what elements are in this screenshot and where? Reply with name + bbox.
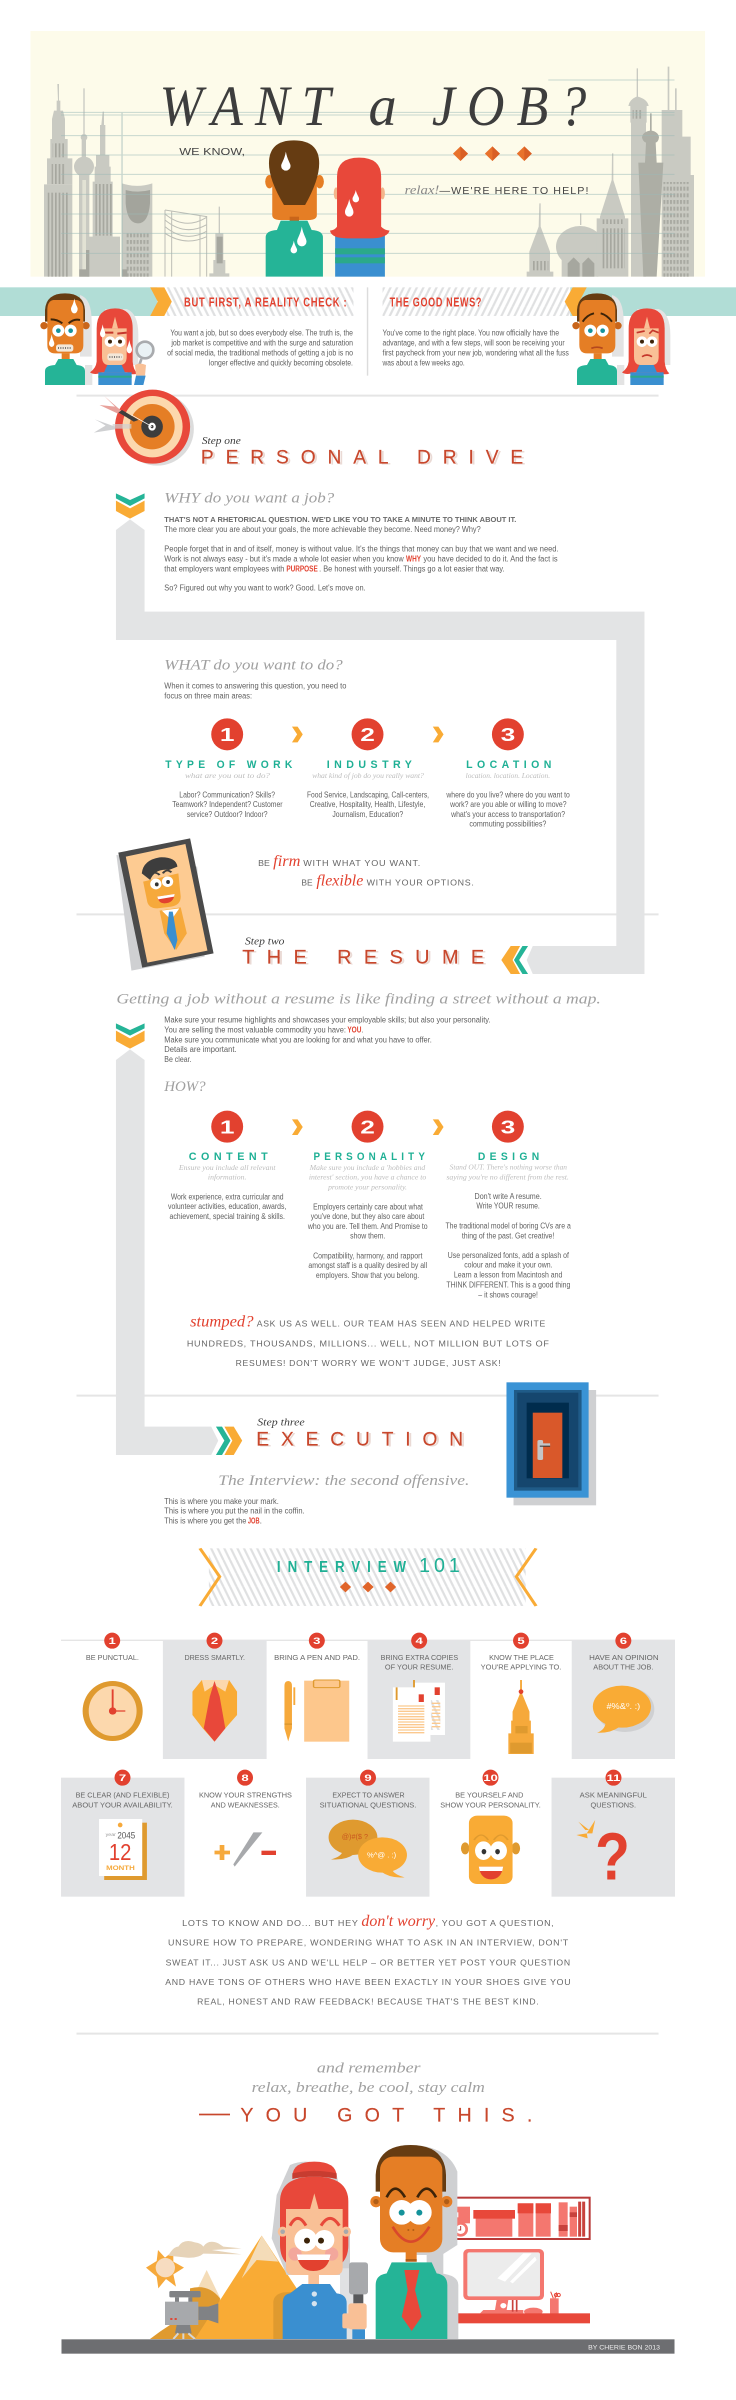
step 3: location: 3 [501,724,515,745]
tip 2: dress smartly: 2 [211,1637,218,1646]
step 1: type of work: service? Outdoor? Indoor? [187,810,268,819]
panel: reality check band: THE GOOD NEWS? [390,295,482,310]
tip 1: be punctual [83,1633,143,1741]
character: worried man [40,293,92,385]
step 3: location: what's your access to transportation? [450,810,566,819]
character: man in tie [370,2145,458,2339]
step 3: location: LOCATION [466,758,556,770]
illustration: sun [146,2250,184,2288]
text block: resume intro: Make sure your resume highlights and showcases your employable skills; but also your personality. [164,1016,491,1025]
tip 3: pen and pad [274,1633,360,1742]
text block: why: . Be honest with yourself. Things go a lot easier that way. [319,565,505,574]
text block: don't worry: , YOU GOT A QUESTION, [436,1919,554,1928]
heading: resume tagline: Getting a job without a resume is like finding a street without a map. [116,990,601,1007]
heading: the resume: THE RESUME [242,947,497,968]
arrow [292,727,303,742]
banner: interview 101: 101 [419,1555,464,1577]
step 2: personality: Compatibility, harmony, and rapport [313,1252,423,1261]
text block: resume intro: Make sure you communicate what you are looking for and what you have to offer. [164,1036,432,1045]
tip 7: availability: 2045 [117,1831,135,1841]
tip 8: strengths: KNOW YOUR STRENGTHS [199,1791,292,1799]
subtitle: relax: —WE'RE HERE TO HELP! [439,185,590,196]
text: design last line: – it shows courage! [478,1291,538,1300]
step 3: design: Learn a lesson from Macintosh and [454,1271,562,1280]
step 3: design: saying you're no different from the rest. [446,1173,569,1181]
illustration: camera [165,2291,218,2339]
icon: microphone [342,2262,368,2339]
step 3: design: Use personalized fonts, add a splash of [448,1251,569,1260]
tip 6: opinion: ABOUT THE JOB. [593,1663,653,1671]
text: relax breathe: relax, breathe, be cool, stay calm [252,2079,485,2095]
footer bar [61,2339,675,2354]
tip 7: availability: 7 [119,1774,126,1783]
callout: be firm: firm [273,853,300,870]
banner: interview 101 [200,1548,536,1606]
text block: don't worry: SWEAT IT... JUST ASK US AND WE'LL HELP – OR BETTER YET POST YOUR QUESTION [166,1959,571,1968]
text block: reality check: job market is competitive and with the surge and saturation [171,339,353,348]
text block: good news: advantage, and with a few steps, will soon be receiving your [383,339,565,348]
text block: interview: JOB [248,1517,260,1526]
step 3: design [445,1111,571,1290]
callout: stumped: ASK US AS WELL. OUR TEAM HAS SEEN AND HELPED WRITE [257,1320,546,1329]
heading: the interview: The Interview: the second offensive. [218,1472,469,1488]
arrow: orange chevron left [150,287,172,316]
tip 3: pen and pad: BRING A PEN AND PAD. [274,1653,360,1662]
tip 9: situational: 9 [364,1774,372,1783]
tip 9: situational: EXPECT TO ANSWER [332,1791,405,1799]
arrow: right chevrons [216,1427,242,1455]
divider [366,287,369,376]
hatch right [383,287,577,316]
illustration: shelf [443,2198,590,2239]
text block: resume intro: Be clear. [164,1055,192,1064]
illustration: right skyline [527,67,694,277]
divider [77,2031,659,2037]
guide lines [61,80,675,277]
text block: why: THAT'S NOT A RHETORICAL QUESTION. WE'D LIKE YOU TO TAKE A MINUTE TO THINK ABOUT IT. [164,515,516,524]
step 2: industry: 2 [360,724,375,745]
text: and remember: and remember [317,2059,422,2076]
character: worried woman with magnifier [90,308,153,385]
title [160,74,598,137]
heading: you got this: YOU GOT THIS. [240,2105,544,2126]
step 2: personality: promote your personality. [327,1183,407,1191]
text block: don't worry: don't worry [361,1913,436,1930]
step 3: design: The traditional model of boring CVs are a [445,1222,571,1231]
text block: good news: You've come to the right place. You now officially have the [383,329,559,338]
step 1: content [168,1111,286,1221]
tip 3: pen and pad: 3 [313,1637,320,1646]
icon: dartboard [94,390,194,466]
heading: the resume: THE RESUME [245,948,499,970]
text block: reality check [167,329,353,368]
icon: framed portrait [116,838,214,971]
tip 7: availability: ABOUT YOUR AVAILABILITY. [72,1801,173,1809]
panel: step one personal drive [77,390,659,720]
step 3: location: commuting possibilities? [469,820,547,829]
step 3: design: Don't write A resume. [475,1192,542,1201]
text block: why: that employers want employees with [164,565,284,574]
character: relieved woman [622,308,670,385]
callout: stumped: stumped? [190,1314,254,1331]
step 3: design: THINK DIFFERENT. This is a good thing [446,1281,570,1290]
step 2: personality: 2 [360,1116,375,1137]
step 3: design: thing of the past. Get creative! [462,1232,554,1241]
step 3: location: where do you live? where do you want to [446,791,570,800]
tip 11: meaningful questions: 11 [607,1774,621,1783]
characters: relieved couple [572,293,670,385]
tip 7: availability: year [106,1833,116,1838]
heading: step one: Step one [202,435,241,446]
callout: stumped [187,1314,550,1368]
panel: three main areas and step two [77,700,659,974]
top rule [61,1638,675,1642]
step 1: type of work: 1 [220,724,235,745]
callout: be firm: WITH WHAT YOU WANT. [303,859,421,868]
illustration: cloud [168,2241,242,2258]
text block: why [164,515,559,593]
step 2: personality: show them. [350,1232,385,1241]
step 1: content: Work experience, extra curricular and [171,1193,284,1202]
panel: step three execution [77,1280,659,1606]
character: woman reporter [272,2162,357,2339]
subtitle: relax: relax! [405,183,439,197]
text block: don't worry [165,1913,571,2007]
step 2: industry [307,718,429,819]
text block: good news [382,329,569,368]
step 3: design: Write YOUR resume. [476,1202,540,1211]
tip 11: meaningful questions [552,1770,675,1897]
step 1: content: 1 [220,1116,235,1137]
text block: resume intro: You are selling the most valuable commodity you have: [164,1026,346,1035]
tip 4: extra copies: OF YOUR RESUME. [385,1663,453,1671]
hatch left [167,287,353,316]
arrow [433,727,444,742]
step 3: location: location. location. Location. [466,771,550,780]
step 1: content: achievement, special training & skills. [169,1212,285,1221]
step 1: type of work: what are you out to do? [185,771,270,780]
path: grey connector [116,519,644,720]
step 2: industry: Creative, Hospitality, Health, Lifestyle, [310,800,425,809]
arrow [292,1119,303,1135]
tip 4: extra copies [368,1633,470,1759]
text block: interview: This is where you get the [164,1517,246,1526]
character: man from behind [265,140,324,277]
hero details [61,74,675,277]
tip 9: situational: SITUATIONAL QUESTIONS. [320,1801,416,1809]
panel: hero banner [31,31,705,277]
text block: why: WHY [406,555,421,564]
tip 9: situational [306,1770,429,1897]
tip 10: be yourself: SHOW YOUR PERSONALITY. [440,1801,541,1809]
step 1: content: Ensure you include all relevant [178,1163,276,1172]
text block: don't worry: UNSURE HOW TO PREPARE, WONDERING WHAT TO ASK IN AN INTERVIEW, DON'T [168,1939,569,1948]
step 2: personality: PERSONALITY [314,1150,429,1162]
tip 2: dress smartly: DRESS SMARTLY. [184,1653,245,1662]
path: grey connector [116,1280,218,1455]
text block: don't worry: AND HAVE TONS OF OTHERS WHO HAVE BEEN EXACTLY IN YOUR SHOES GIVE YOU [165,1978,571,1987]
illustration: monitor and desk [448,2249,590,2323]
step 2: industry: what kind of job do you really want? [312,771,424,780]
tip 11: meaningful questions: ? [595,1820,630,1894]
step 3: design: DESIGN [478,1150,544,1162]
tip 4: extra copies: 4 [416,1637,424,1646]
illustration: left skyline [43,84,229,277]
text block: what intro [164,682,347,701]
title: JOB? [432,74,598,137]
heading: step three: Step three [257,1417,305,1428]
text block: why: you have decided to do it. And the fact is [423,555,558,564]
step 2: personality: interest' section, you have a chance to [309,1173,427,1181]
step 3: location: work? are you able or willing to move? [449,800,567,809]
tip 5: know the place [481,1633,561,1754]
text block: reality check: of social media, the traditional methods of getting a job is no [167,349,353,358]
text block: interview: . [260,1517,262,1526]
path: grey connector [527,700,644,974]
tip 5: know the place: YOU'RE APPLYING TO. [481,1663,561,1671]
tip 6: opinion: #%&⁰. :) [606,1702,640,1711]
step 1: content: volunteer activities, education, awards, [168,1202,286,1211]
tip 7: availability: MONTH [106,1864,135,1872]
callout: stumped: HUNDREDS, THOUSANDS, MILLIONS... WELL, NOT MILLION BUT LOTS OF [187,1340,550,1349]
step 3: design: 3 [501,1116,515,1137]
tip 9: situational: @)#($ ? [342,1832,368,1841]
tip 11: meaningful questions: QUESTIONS. [590,1801,636,1809]
step 2: industry: INDUSTRY [327,758,416,770]
callout: be flexible: WITH YOUR OPTIONS. [367,879,475,888]
tip 7: availability: BE CLEAR (AND FLEXIBLE) [76,1791,169,1799]
text block: resume intro [164,1016,491,1064]
subtitle: we know: WE KNOW, [179,146,245,157]
heading: execution [256,1429,477,1452]
title: WANT [160,74,343,137]
text block: why: So? Figured out why you want to work? Good. Let's move on. [164,584,366,593]
footer bar: BY CHERIE BON 2013 [588,2344,660,2351]
tip 8: strengths [199,1770,292,1867]
text block: good news: first paycheck from your new job, wondering what all the fuss [383,349,569,358]
callout: be firm [258,853,421,870]
tip 9: situational: %^@ . :) [367,1851,396,1859]
hero background [31,31,705,277]
panel: reality check band [0,287,736,376]
text block: what intro: focus on three main areas: [164,692,252,701]
illustration: mountains [150,2236,297,2339]
heading: how: HOW? [163,1078,206,1094]
step 2: industry: Food Service, Landscaping, Call-centers, [307,791,429,800]
text block: interview: This is where you put the nail in the coffin. [164,1507,305,1516]
arrow: down chevrons [116,1023,145,1049]
step 1: content: information. [208,1173,246,1181]
tip 6: opinion [572,1633,675,1759]
heading: step two: Step two [245,935,284,947]
arrow: orange chevron right [565,287,587,316]
text block: resume intro: YOU [347,1026,361,1035]
step 2: personality: who you are. Tell them. And Promise to [307,1222,428,1231]
step 2: industry: Journalism, Education? [332,810,404,819]
path: grey connector [116,1049,145,1290]
arrow: down chevrons [116,493,145,519]
step 3: design: colour and make it your own. [464,1261,552,1270]
heading: execution: EXECUTION [256,1429,475,1450]
step 2: personality [307,1111,429,1280]
heading: personal drive: PERSONAL DRIVE [203,448,537,470]
tip 8: strengths: AND WEAKNESSES. [211,1801,280,1809]
heading: what: WHAT do you want to do? [164,656,343,673]
divider [77,1393,659,1399]
panel: resume details [116,990,601,1290]
characters: worried couple [40,293,153,385]
text block: why: Work is not always easy - but it's made a whole lot easier when you know [164,555,404,564]
step 1: type of work [165,718,297,819]
teal band left [0,287,157,316]
divider [77,393,659,399]
tip 8: strengths: 8 [241,1774,249,1783]
text block: resume intro: Details are important. [164,1045,237,1054]
text block: what intro: When it comes to answering this question, you need to [164,682,347,691]
tip 1: be punctual: BE PUNCTUAL. [86,1653,139,1662]
banner: interview 101: INTERVIEW [277,1558,413,1575]
step 1: type of work: Labor? Communication? Skills? [179,791,275,800]
step 2: personality: employers. Show that you belong. [316,1271,419,1280]
text block: don't worry: REAL, HONEST AND RAW FEEDBACK! BECAUSE THAT'S THE BEST KIND. [197,1998,539,2007]
tip 10: be yourself [440,1770,541,1884]
text block: reality check: longer effective and quickly becoming obsolete. [209,359,353,368]
character: woman from behind [330,158,390,277]
illustration: closing scene [146,2145,590,2339]
teal band right [570,287,736,316]
text block: reality check: You want a job, but so does everybody else. The truth is, the [170,329,353,338]
tip 7: availability: 12 [109,1840,131,1866]
step 1: type of work: TYPE OF WORK [165,758,297,770]
icon: three diamonds [453,146,532,161]
tip 4: extra copies: BRING EXTRA COPIES [381,1653,458,1662]
callout: stumped: RESUMES! DON'T WORRY WE WON'T JUDGE, JUST ASK! [236,1359,501,1368]
divider [77,911,659,917]
step 1: content: CONTENT [189,1150,272,1162]
arrow [433,1119,444,1135]
text block: why: The more clear you are about your goals, the more achievable they become. Need money? Why? [164,525,481,534]
heading: why: WHY do you want a job? [164,490,334,506]
heading: personal drive: PERSONAL DRIVE [201,447,535,468]
step 2: personality: Make sure you include a 'hobbies and [309,1163,426,1172]
step 2: personality: Employers certainly care about what [313,1203,423,1212]
heading: personal drive [201,447,537,470]
arrow: left chevrons [501,946,528,974]
heading: execution: EXECUTION [259,1430,477,1452]
text block: good news: was about a few weeks ago. [382,359,465,368]
tip 6: opinion: HAVE AN OPINION [589,1653,659,1662]
callout: be flexible: flexible [316,872,364,889]
step 2: personality: amongst staff is a quality desired by all [308,1261,427,1270]
callout: be flexible: BE [301,879,313,888]
panel: interview tips grid [61,1633,675,1897]
character: relieved man [572,293,624,385]
panel: closing [77,1913,659,2095]
text block: interview: This is where you make your mark. [164,1497,279,1506]
text block: why: PURPOSE [286,565,318,574]
callout: be flexible [301,872,475,889]
step 2: personality: you've done, but they also care about [311,1212,425,1221]
tip 2: dress smartly [163,1633,267,1759]
tip 10: be yourself: BE YOURSELF AND [455,1791,524,1799]
step 1: type of work: Teamwork? Independent? Customer [172,800,283,809]
tip 6: opinion: 6 [620,1637,627,1646]
tip 1: be punctual: 1 [109,1637,117,1646]
step 3: location [446,718,570,829]
tip 7: availability [61,1770,184,1897]
title: a [368,74,397,137]
tip 11: meaningful questions: ASK MEANINGFUL [580,1791,647,1799]
icon: door [506,1382,596,1505]
text block: don't worry: LOTS TO KNOW AND DO... BUT HEY [182,1919,359,1928]
tip 10: be yourself: 10 [483,1774,498,1783]
callout: be firm: BE [258,859,270,868]
text block: resume intro: . [361,1026,363,1035]
subtitle: relax [405,183,590,197]
tip 5: know the place: KNOW THE PLACE [489,1653,554,1662]
step 3: design: Stand OUT. There's nothing worse than [450,1163,567,1171]
tip 5: know the place: 5 [517,1637,525,1646]
heading: reality check: BUT FIRST, A REALITY CHECK : [184,295,347,310]
text block: interview [164,1497,305,1526]
